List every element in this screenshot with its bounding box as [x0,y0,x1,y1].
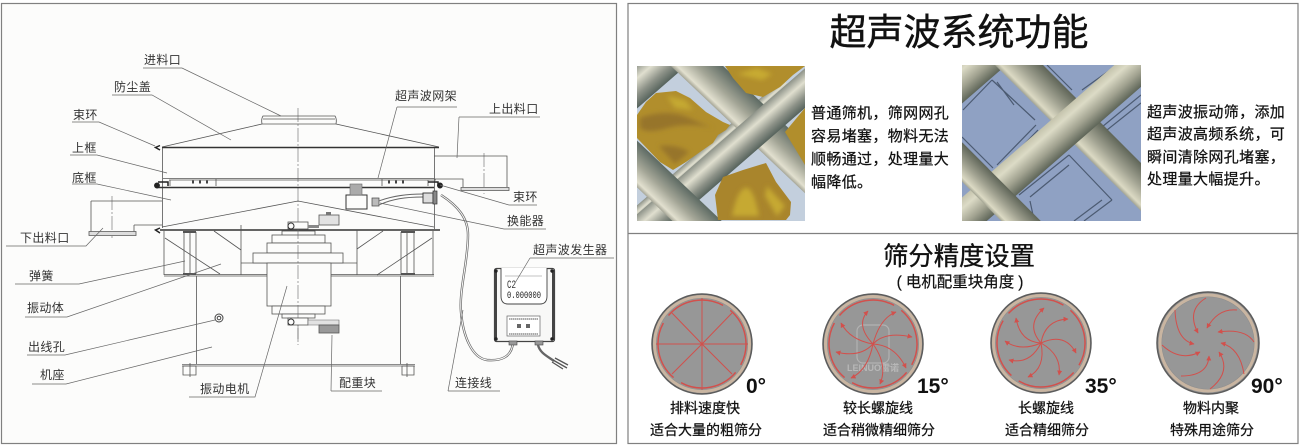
text: ordinary sieve [811,105,949,191]
wire diagonal lower [962,142,1041,221]
text: ultrasonic sieve: 超声波高频系统，可 [1147,125,1285,143]
image: clean ultrasonic mesh [962,65,1141,221]
label: 束环 right: 束环 [513,190,538,204]
angle: 90: 90° [1251,375,1283,398]
label: 束环 left: 束环 [73,108,98,122]
caption: 90 degrees: 特殊用途筛分 [1170,422,1254,438]
connecting cable [441,195,513,360]
inner square lines [962,65,1141,221]
caption: 15 degrees [823,400,935,438]
wire bottom-left [637,82,787,214]
text: ordinary sieve: 幅降低。 [811,174,872,191]
feed inlet collar [262,116,336,124]
wire bottom-left [805,79,1119,355]
label: 超声波网架: 超声波网架 [395,88,457,103]
caption: 0 degrees: 适合大量的粗筛分 [650,422,762,438]
caption: 35 degrees [1005,400,1089,438]
label: 下出料口: 下出料口 [20,231,70,245]
title: 超声波系统功能 [830,12,1088,53]
caption: 0 degrees: 排料速度快 [670,400,740,416]
label: 进料口: 进料口 [144,53,181,67]
disc: 0 degrees [640,282,764,406]
text: ultrasonic sieve: 瞬间清除网孔堵塞， [1147,148,1285,166]
label: 上出料口: 上出料口 [489,102,539,116]
gold blob left [637,91,730,170]
image: clogged ordinary mesh [637,66,805,221]
springs [183,231,415,275]
angle: 0: 0° [746,375,766,398]
angle: 35: 35° [1085,375,1117,398]
text: ultrasonic sieve: 处理量大幅提升。 [1147,171,1270,188]
vibrating body [164,225,434,276]
label: 机座: 机座 [40,367,65,382]
gold blob top [725,66,805,97]
label: 换能器: 换能器 [507,214,544,228]
counterweight lower [288,318,339,333]
caption: 90 degrees [1170,400,1254,438]
ultrasonic generator: 0.000000 [507,291,541,302]
wire top-left [962,65,1000,104]
label: 连接线: 连接线 [455,375,492,390]
caption: 35 degrees: 长螺旋线 [1018,400,1074,416]
text: ordinary sieve: 普通筛机，筛网网孔 [811,105,949,122]
disc: 35 degrees [979,281,1103,405]
angle: 15: 15° [917,375,949,398]
cone [162,201,434,227]
wire diagonal upper [671,66,805,194]
panel: sieve machine diagram [2,4,616,444]
label: 底框: 底框 [72,170,97,185]
ultrasonic generator [494,268,568,369]
caption: 0 degrees [650,400,762,438]
disc: 90 degrees [1157,292,1259,394]
disc: 15 degrees [811,282,935,406]
watermark logo: LEINUO雷诺 [847,362,899,373]
heading: screening precision: 筛分精度设置 [883,243,1035,271]
text: ordinary sieve: 顺畅通过，处理量大 [811,151,949,168]
panel: ultrasonic function [627,2,1299,444]
wire diagonal centre [637,68,805,221]
counterweight upper [288,212,339,229]
wire diagonal lower [637,140,722,221]
text: ordinary sieve: 容易堵塞，物料无法 [811,127,949,145]
ultrasonic generator: C2 [507,280,516,292]
gold blob bottom [715,163,791,220]
label: 振动电机: 振动电机 [200,382,250,396]
clamp rings [155,146,442,233]
leader lines [6,68,614,397]
caption: 15 degrees: 较长螺旋线 [843,400,913,416]
caption: 35 degrees: 适合精细筛分 [1005,422,1089,438]
subheading: ( 电机配重块角度 ) [897,273,1023,291]
upper outlet [434,156,507,187]
upper frame [162,148,434,229]
label: 振动体: 振动体 [27,301,64,315]
text: ultrasonic sieve [1147,103,1285,188]
caption: 15 degrees: 适合稍微精细筛分 [823,422,935,438]
drawing: sieve machine [89,108,568,377]
cable hole [215,314,223,322]
vibration motor [253,231,343,318]
ultrasonic mesh frame [157,178,436,188]
label: 配重块: 配重块 [339,376,376,390]
text: ultrasonic sieve: 超声波振动筛，添加 [1147,103,1285,121]
gold blob right [785,108,805,165]
lower outlet [91,201,162,232]
base frame [196,276,400,364]
dust cover [162,124,439,147]
transducer [346,184,437,209]
label: 弹簧: 弹簧 [29,268,54,283]
caption: 90 degrees: 物料内聚 [1183,400,1239,416]
label: 超声波发生器: 超声波发生器 [533,242,607,257]
wire top-left [637,66,678,108]
wire diagonal centre [962,65,1141,221]
label: 出线孔: 出线孔 [28,340,65,354]
wire diagonal upper [995,65,1141,211]
label: 防尘盖: 防尘盖 [114,79,151,94]
label: 上框: 上框 [72,141,97,155]
